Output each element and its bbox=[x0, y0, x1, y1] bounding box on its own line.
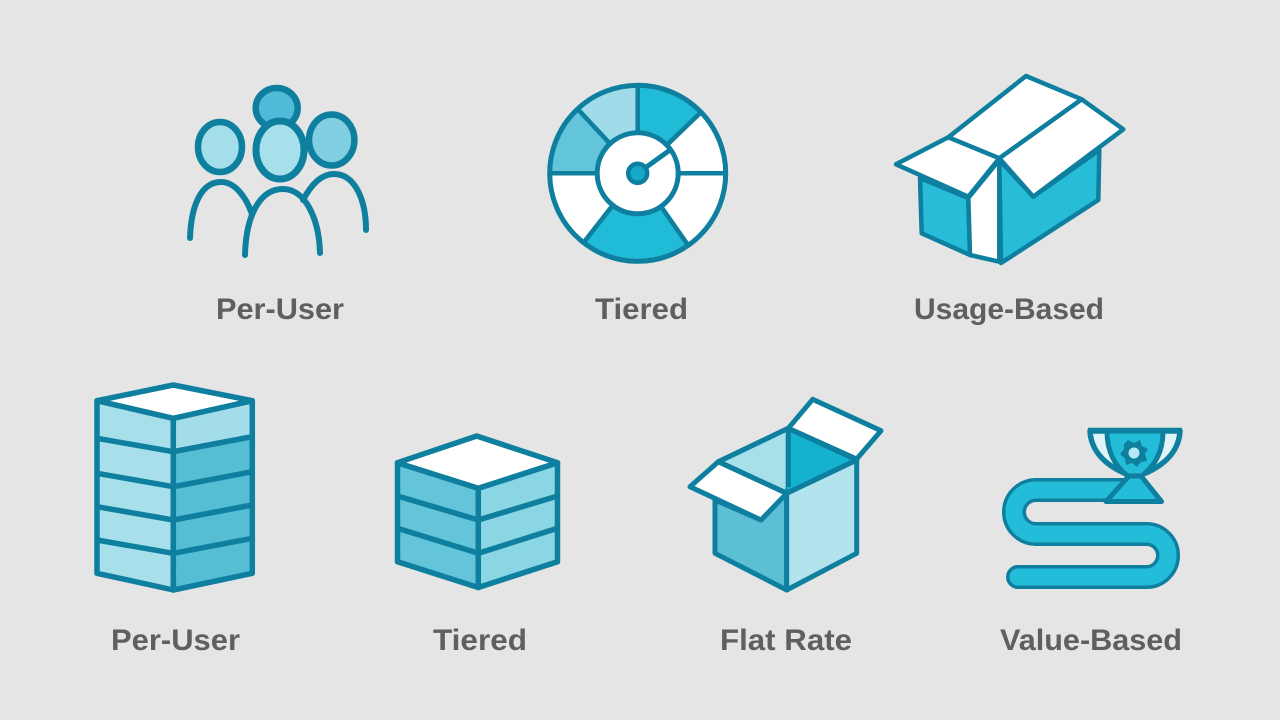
right flap bbox=[788, 399, 881, 459]
emblem centre bbox=[1128, 448, 1140, 458]
trophy base bbox=[1106, 476, 1162, 502]
left flap bbox=[690, 462, 787, 520]
interior left bbox=[718, 428, 788, 493]
trophy emblem bbox=[1120, 440, 1148, 467]
segment: teal bottom bbox=[584, 173, 688, 261]
icon: group of users bbox=[190, 88, 366, 255]
icon: short stack bbox=[398, 436, 558, 588]
middle head bbox=[256, 121, 304, 179]
middle shoulders bbox=[245, 189, 320, 255]
interior right bbox=[787, 428, 857, 493]
gauge outer disc bbox=[550, 85, 726, 261]
icon: tiered gauge dial bbox=[550, 85, 726, 261]
stack dividers bbox=[97, 438, 252, 553]
box right face bbox=[999, 150, 1099, 263]
stack top bbox=[97, 385, 252, 418]
segment: white left lower bbox=[550, 173, 638, 243]
rim and inner corner bbox=[718, 428, 857, 493]
icon: winding path to trophy bbox=[1014, 430, 1182, 577]
needle bbox=[638, 150, 670, 173]
winding path fill bbox=[1014, 490, 1168, 577]
label: Per-User bottom: Per-User bbox=[111, 624, 240, 657]
icon: wide open box bbox=[896, 76, 1123, 263]
right shoulders bbox=[303, 174, 366, 230]
left shoulders bbox=[190, 182, 252, 238]
icon: open cube box bbox=[690, 399, 881, 590]
back head bbox=[256, 88, 298, 128]
segment: medium left upper bbox=[550, 109, 638, 173]
left head bbox=[198, 122, 242, 172]
segment: mid teal top right bbox=[638, 85, 701, 173]
right head bbox=[309, 114, 354, 166]
inner white dial bbox=[597, 133, 678, 214]
trophy rim bbox=[1088, 428, 1182, 433]
short stack left face bbox=[398, 463, 478, 588]
label: Per-User top: Per-User bbox=[216, 293, 344, 326]
short stack right face bbox=[478, 463, 558, 588]
icon: tall stack bbox=[97, 385, 252, 590]
short stack top bbox=[398, 436, 558, 488]
trophy cup bbox=[1107, 431, 1163, 477]
stack right top band bbox=[173, 401, 252, 452]
box white strip bbox=[968, 160, 999, 262]
stack right lower face bbox=[173, 437, 252, 590]
box left face bbox=[920, 178, 970, 255]
winding path outline bbox=[1014, 490, 1168, 577]
gauge outer ring bbox=[550, 85, 726, 261]
short stack dividers bbox=[398, 496, 558, 553]
left flap bbox=[896, 137, 999, 197]
label: Tiered bottom: Tiered bbox=[433, 624, 527, 657]
segment: white right lower bbox=[638, 173, 726, 245]
label: Flat Rate: Flat Rate bbox=[720, 624, 852, 657]
left face bbox=[715, 493, 787, 590]
label: Tiered top: Tiered bbox=[595, 293, 688, 326]
hub bbox=[628, 164, 647, 183]
trophy handles bbox=[1090, 431, 1180, 473]
segment: white right upper bbox=[638, 112, 726, 173]
right flap bbox=[999, 99, 1123, 197]
right face bbox=[787, 460, 857, 590]
label: Value-Based: Value-Based bbox=[1000, 624, 1182, 657]
stack left face bbox=[97, 401, 173, 590]
back flap bbox=[948, 76, 1082, 158]
label: Usage-Based: Usage-Based bbox=[914, 293, 1104, 326]
segment: pale top left bbox=[578, 85, 638, 173]
